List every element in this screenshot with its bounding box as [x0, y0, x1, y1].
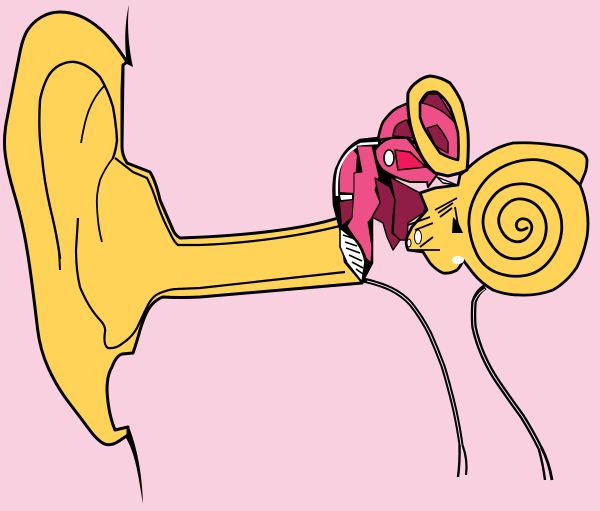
middle ear: [334, 103, 437, 282]
chamber silhouette: [334, 138, 395, 282]
left maroon: [340, 200, 353, 225]
maroon cavity right: [390, 177, 428, 240]
white wedge: [437, 177, 457, 185]
cochlea spiral: [469, 160, 580, 276]
neck line: upper: [125, 5, 133, 67]
outer ear and ear canal: [4, 12, 362, 445]
ear fold: antihelix: [97, 158, 113, 242]
white oval: round window: [414, 230, 422, 244]
canal opening: [420, 92, 458, 160]
red window: [395, 150, 426, 170]
eardrum: [340, 228, 365, 282]
vestibule pink: [375, 138, 437, 187]
left pink chamber: [340, 150, 357, 193]
semicircular canal: [408, 76, 468, 185]
ear fold: lobe: [59, 250, 60, 270]
black wedge: [452, 217, 463, 233]
central hammer pink: [347, 146, 382, 263]
ear back thick edge: [122, 68, 123, 145]
opening dark band top: [422, 94, 455, 123]
upper pink dome: [378, 103, 425, 150]
white pill: [340, 195, 352, 200]
upper maroon: [393, 120, 414, 138]
ear fold: inner curve: [81, 85, 105, 143]
ear fold: concha: [76, 218, 345, 348]
eardrum hatching: [343, 235, 363, 274]
nerve fibres: [408, 198, 458, 250]
maroon cavity left: [372, 178, 400, 250]
ear fold: helix: [39, 62, 117, 258]
nerve: right cable: [474, 287, 552, 480]
white oval: [384, 150, 394, 166]
white oval: lower: [452, 256, 464, 264]
ear fold: rim: [115, 158, 340, 245]
white tube: [337, 143, 378, 196]
white oval: small: [407, 239, 411, 247]
nerve: lower left cable: [363, 280, 467, 477]
neck line: lower: [126, 427, 143, 504]
opening dark band lower: [427, 125, 448, 153]
cochlea and vestibule: [406, 143, 588, 295]
